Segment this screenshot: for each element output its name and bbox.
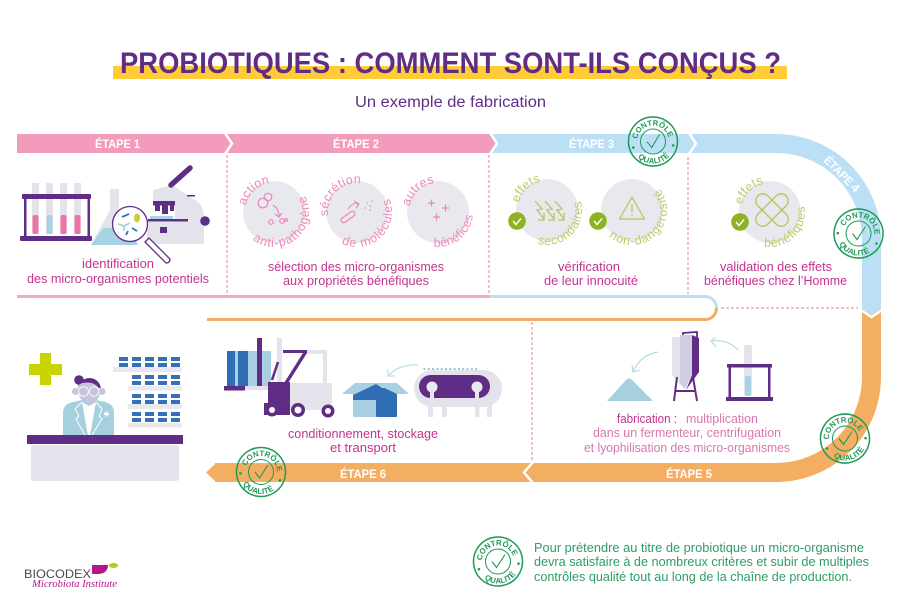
stamp: contrôle qualité legend: CONTRÔLE [477,540,518,560]
footnote text: contrôles qualité tout au long de la chaîne de production. [534,570,852,584]
stamp: contrôle qualité step 6: QUALITÉ [244,482,274,494]
caption: step 2: sélection des micro-organismes [268,259,444,274]
step labels: ÉTAPE 1 [95,136,140,151]
icon: pharmacy counter [27,435,183,481]
icon: pharmacy shelves [113,357,182,428]
step labels [95,136,864,481]
icon: test tube rack [20,183,92,241]
step labels: ÉTAPE 3 [569,136,614,151]
caption: step 6: conditionnement, stockage [288,426,438,441]
arrow: conveyor to box [388,365,418,376]
panel: non-dangerosité: non-dangerosité [610,190,667,245]
arrow: tube to fermenter [711,337,738,350]
footnote text [534,541,869,584]
step labels: ÉTAPE 4 [821,153,864,195]
caption: step 5: et lyophilisation des micro-organismes [584,440,790,455]
icon: cardboard box [342,383,409,417]
panel: autres bénéfices: autres [404,177,434,206]
panel: autres bénéfices: bénéfices [434,215,473,248]
caption: step 3: vérification [558,259,620,274]
caption: step 6: et transport [330,440,396,455]
icon: microscope [147,168,210,244]
caption: step 2 [268,259,444,288]
icon: pharmacy cross [29,353,62,385]
step labels: ÉTAPE 5 [666,466,712,481]
icon: fermentation tube on stand [726,345,773,401]
panel: effets bénéfiques [731,178,805,247]
footnote text: Pour prétendre au titre de probiotique un micro-organisme [534,541,864,555]
panel: sécrétion de molécules: de molécules [342,199,392,247]
caption: step 6 [288,426,438,455]
panel: action anti-pathogène: anti-pathogène [253,196,310,249]
stamp: contrôle qualité step 5: CONTRÔLE [824,416,864,439]
panel: effets secondaires: secondaires [538,202,582,246]
stamp: contrôle qualité step 3: QUALITÉ [638,152,670,164]
panel: effets secondaires: effets [513,176,540,202]
icon: fermenter silo [672,332,699,401]
caption: step 5 [584,411,790,455]
logo: Biocodex Microbiota Institute: Microbiota Institute [31,579,117,590]
stamp: contrôle qualité step 5 [820,413,870,464]
title: PROBIOTIQUES : COMMENT SONT-ILS CONÇUS ? [120,47,781,80]
caption: step 1 [27,256,209,286]
panel: non-dangerosité [589,179,667,245]
panel: sécrétion de molécules [320,176,392,247]
stamp: contrôle qualité step 3: CONTRÔLE [632,120,674,138]
icon: powder pile [602,378,658,401]
panel: effets secondaires [508,176,582,246]
panel: sécrétion de molécules: sécrétion [320,176,360,216]
arrow: fermenter to powder [632,352,658,372]
panel: action anti-pathogène [240,177,310,249]
stamp: contrôle qualité legend [472,536,524,587]
caption: step 4: bénéfiques chez l’Homme [704,273,847,288]
caption: step 3 [544,259,638,288]
panel: action anti-pathogène: action [240,177,269,205]
icon: zigzag arrows [535,201,564,220]
panel: effets bénéfiques: effets [736,178,763,204]
icon: forklift with pallet [224,338,334,418]
caption: step 5: dans un fermenteur, centrifugation [593,425,781,440]
icon: green check [731,213,749,231]
caption: step 1: identification [82,256,154,271]
stamp: contrôle qualité legend: QUALITÉ [485,570,516,584]
caption: step 1: des micro-organismes potentiels [27,271,209,286]
panel: effets bénéfiques: bénéfiques [764,207,805,247]
caption: step 3: de leur innocuité [544,273,638,288]
stamp: contrôle qualité step 5: QUALITÉ [834,446,864,461]
stamp: contrôle qualité step 6: CONTRÔLE [242,450,282,472]
stamp: contrôle qualité step 3 [628,116,678,167]
stamp: contrôle qualité step 4 [833,208,884,259]
separator line between rows [17,296,716,320]
icon: capsule secreting molecules [340,201,372,224]
caption: step 4: validation des effets [720,259,832,274]
stamp: contrôle qualité step 4: CONTRÔLE [840,212,880,234]
icon: pharmacist [63,375,114,436]
stamp: contrôle qualité step 4: QUALITÉ [840,242,870,256]
step labels: ÉTAPE 6 [340,466,386,481]
process path band [17,133,882,483]
stamp: contrôle qualité step 6 [236,446,286,498]
icon: plus signs [428,200,449,220]
caption: step 4 [704,259,847,288]
step labels: ÉTAPE 2 [333,136,379,151]
caption: step 5: fabrication : [617,411,677,426]
icon: flask and magnifier [91,189,170,263]
icon: warning triangle [620,197,644,219]
caption: step 2: aux propriétés bénéfiques [283,273,429,288]
icon: green check [508,212,526,230]
icon: crossed plasters [753,191,791,229]
footnote text: devra satisfaire à de nombreux critères et subir de multiples [534,555,869,569]
icon: microbes [258,193,288,224]
logo: Biocodex Microbiota Institute [24,563,118,590]
icon: conveyor belt [414,369,502,417]
subtitle: Un exemple de fabrication [355,94,546,111]
panel: autres bénéfices [404,177,473,248]
icon: green check [589,212,607,230]
caption: step 5: multiplication [686,411,758,426]
logo: Biocodex Microbiota Institute: BIOCODEX [24,569,91,581]
